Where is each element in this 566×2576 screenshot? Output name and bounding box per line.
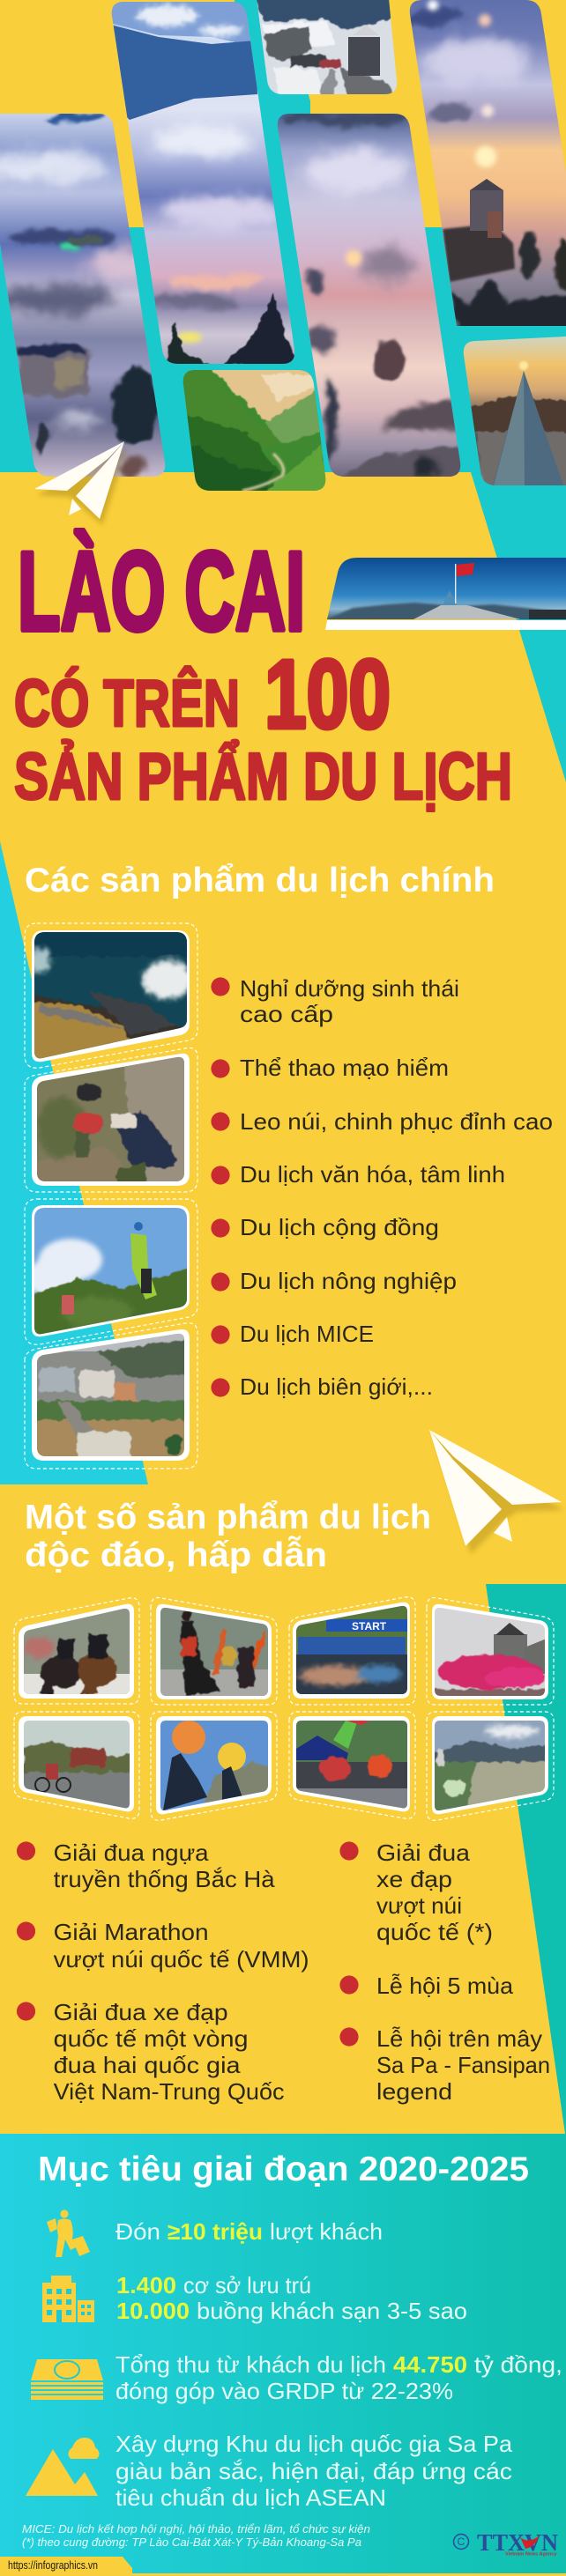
list: unique products left: Giải đua xe đạp — [54, 1999, 228, 2025]
heading: unique products: Một số sản phẩm du lịch — [25, 1499, 431, 1536]
panel: unique product photos — [14, 1597, 554, 1820]
photo card: Fansipan festival — [427, 1712, 554, 1820]
panel: targets 2020-2025 — [0, 2134, 566, 2573]
photo card: cyclist — [14, 1712, 139, 1818]
text: Sa Pa national tourism area target: tiêu chuẩn du lịch ASEAN — [115, 2484, 386, 2511]
photo: rice terraces — [183, 370, 326, 491]
list: unique products left: quốc tế một vòng — [54, 2025, 249, 2052]
list: unique products left: đua hai quốc gia — [54, 2052, 241, 2078]
list: unique products right: legend — [376, 2078, 452, 2105]
text: visitors target: Đón — [115, 2218, 160, 2245]
text: footnotes: MICE: Du lịch kết hợp hội nghị, hội thảo, triển lãm, tổ chức sự kiện — [22, 2522, 370, 2535]
photo card: cycling race — [289, 1712, 415, 1818]
list: main tourism products: Du lịch MICE — [240, 1321, 374, 1347]
text: Sa Pa national tourism area target: Xây dựng Khu du lịch quốc gia Sa Pa — [115, 2431, 513, 2457]
heading: unique products: độc đáo, hấp dẫn — [25, 1536, 327, 1574]
list: unique products left — [17, 1839, 309, 2105]
text: accommodation target: 10.000 — [116, 2298, 190, 2324]
heading: unique products — [25, 1499, 431, 1574]
list: main tourism products: Nghỉ dưỡng sinh thái — [240, 975, 459, 1002]
text: accommodation target: buồng khách sạn 3-5 sao — [197, 2298, 467, 2324]
list: unique products left: truyền thống Bắc Hà — [54, 1866, 275, 1892]
photo card: border town — [25, 1323, 197, 1469]
logo: TTXVN: C — [457, 2535, 465, 2548]
text: revenue target — [115, 2351, 562, 2404]
photo: misty church — [406, 0, 566, 330]
photo card: ethnic dancers — [151, 1597, 277, 1705]
photo card: fan dancers — [151, 1712, 277, 1820]
list: main tourism products: Du lịch văn hóa, tâm linh — [240, 1161, 505, 1188]
icon: paper plane middle — [429, 1430, 564, 1554]
heading: 100: 100 — [264, 640, 391, 749]
text: accommodation target — [116, 2272, 467, 2324]
panel: main products background wedge — [0, 841, 148, 1484]
list: main tourism products: Du lịch cộng đồng — [240, 1214, 439, 1240]
icon: traveler — [47, 2210, 90, 2257]
icon: mountain and cloud — [26, 2438, 100, 2496]
banner: website — [0, 2557, 566, 2576]
photo card: horse race — [14, 1598, 139, 1704]
text: footnotes: (*) theo cung đường: TP Lào Cai-Bát Xát-Y Tý-Bản Khoang-Sa Pa — [22, 2535, 361, 2549]
text: visitors target — [115, 2218, 383, 2245]
text: revenue target: Tổng thu từ khách du lịch — [115, 2351, 386, 2378]
heading: main products: Các sản phẩm du lịch chính — [25, 862, 495, 899]
list: unique products right: Giải đua — [376, 1839, 471, 1866]
list: unique products left: Giải đua ngựa — [54, 1839, 209, 1866]
panel: top photo collage — [0, 0, 566, 782]
photo card: zipline — [25, 1199, 197, 1344]
photo: cloud above mountains — [106, 0, 300, 366]
photo card: trekkers — [25, 1047, 197, 1192]
list: unique products right: vượt núi — [376, 1892, 462, 1919]
banner: website: https://infographics.vn — [8, 2558, 98, 2572]
photo: flag on Fansipan — [322, 558, 566, 630]
text: revenue target: đóng góp vào GRDP từ 22-23% — [115, 2378, 453, 2404]
panel: teal right wedge — [486, 1584, 566, 2134]
list: main tourism products: Leo núi, chinh phục đỉnh cao — [240, 1108, 553, 1135]
list: main tourism products: Thể thao mạo hiểm — [240, 1055, 449, 1081]
list: unique products right: Lễ hội trên mây — [376, 2025, 542, 2052]
list: unique products left: vượt núi quốc tế (VMM) — [54, 1946, 309, 1973]
photo: Fansipan pyramid — [458, 335, 566, 490]
text: Sa Pa national tourism area target — [115, 2431, 513, 2511]
heading: có trên: CÓ TRÊN — [14, 666, 240, 740]
logo: TTXVN: Vietnam News Agency — [505, 2551, 557, 2557]
photo: misty town — [0, 114, 166, 477]
panel: main product photos — [25, 923, 197, 1469]
list: unique products left: Giải Marathon — [54, 1919, 209, 1945]
text: accommodation target: 1.400 — [116, 2272, 176, 2298]
photo card: marathon start: START — [352, 1620, 387, 1632]
list: unique products right: xe đạp — [376, 1866, 452, 1892]
photo: fog with sunset lights — [273, 114, 473, 485]
list: unique products left: Việt Nam-Trung Quốc — [54, 2078, 285, 2105]
text: visitors target: lượt khách — [270, 2218, 383, 2245]
list: main tourism products: Du lịch nông nghiệp — [240, 1268, 457, 1294]
text: Sa Pa national tourism area target: giàu bản sắc, hiện đại, đáp ứng các — [115, 2458, 512, 2484]
text: revenue target: 44.750 — [393, 2351, 467, 2378]
icon: hotel — [42, 2276, 94, 2322]
list: unique products right: Lễ hội 5 mùa — [376, 1973, 514, 1999]
list: unique products right: Sa Pa - Fansipan — [376, 2052, 550, 2078]
heading: targets: Mục tiêu giai đoạn 2020-2025 — [38, 2150, 529, 2188]
panel: title — [14, 529, 566, 813]
list: main tourism products: cao cấp — [240, 1001, 333, 1027]
text: accommodation target: cơ sở lưu trú — [183, 2272, 311, 2298]
photo card: marathon start — [289, 1597, 415, 1705]
icon: paper plane top — [34, 441, 127, 525]
text: footnotes — [22, 2522, 370, 2549]
photo: snow at Sa Pa — [257, 0, 397, 94]
list: unique products right — [339, 1839, 550, 2105]
list: main tourism products: Du lịch biên giới,... — [240, 1373, 433, 1400]
photo card: resort — [25, 923, 197, 1068]
text: revenue target: tỷ đồng, — [474, 2351, 562, 2378]
heading: Lào Cai: LÀO CAI — [18, 529, 305, 654]
list: unique products right: quốc tế (*) — [376, 1919, 493, 1945]
icon: money — [31, 2359, 103, 2400]
text: visitors target: ≥10 triệu — [168, 2218, 263, 2245]
logo: TTXVN: TTXVN — [477, 2529, 558, 2556]
photo card: pink umbrellas — [427, 1597, 554, 1705]
list: main tourism products — [211, 975, 553, 1400]
